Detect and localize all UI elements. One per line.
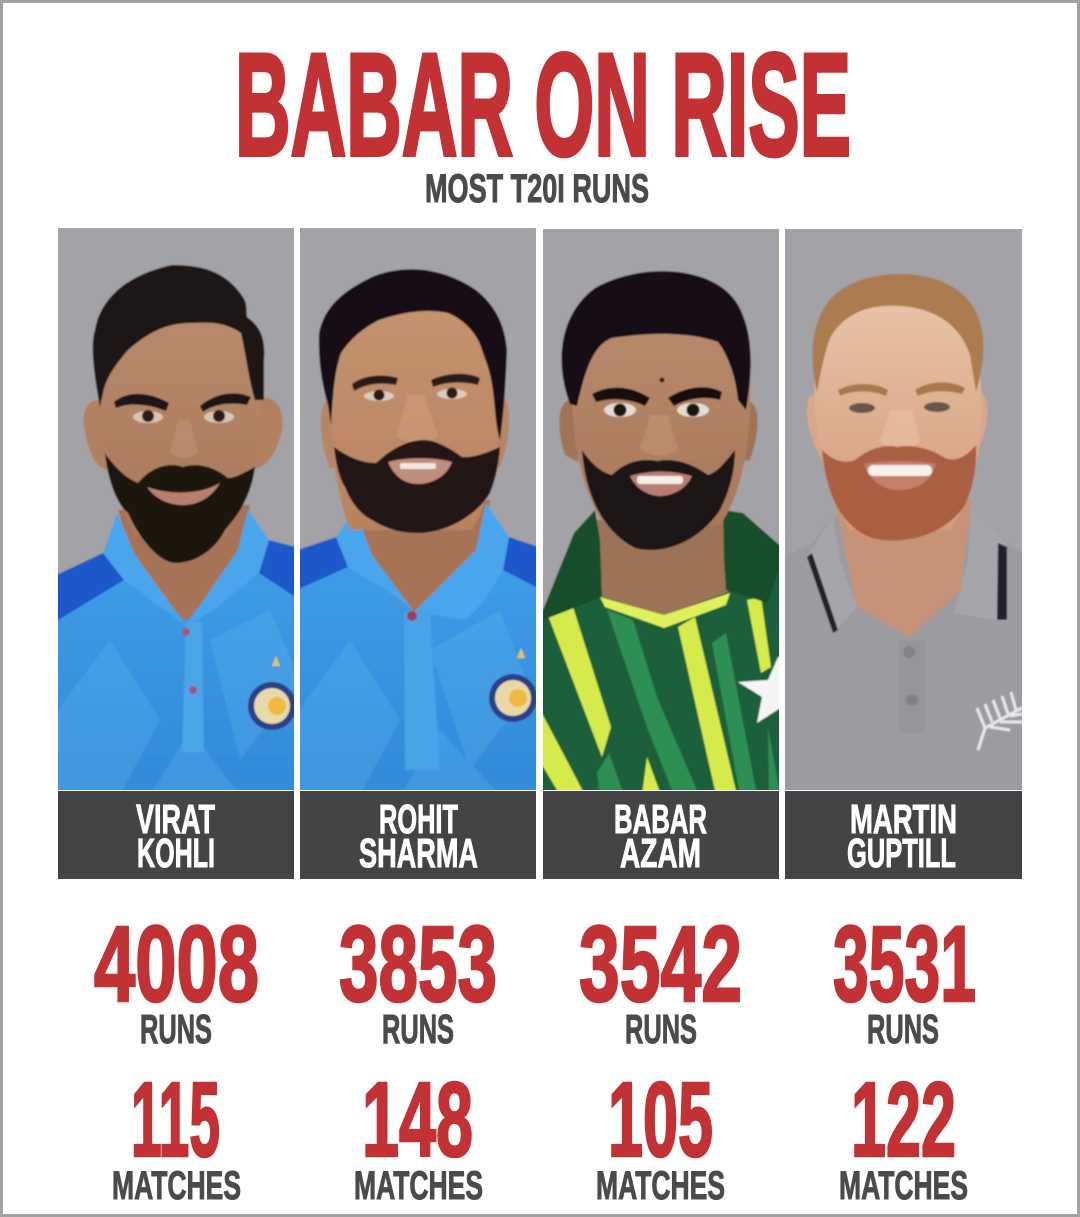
stats: Martin Guptill: MATCHES [839, 1164, 968, 1208]
stats: Virat Kohli: MATCHES [112, 1164, 241, 1208]
stats: Babar Azam: MATCHES [596, 1164, 725, 1208]
beard [334, 440, 500, 533]
ears [807, 395, 822, 460]
eyebrows and eyes [352, 376, 398, 391]
name bar: Martin Guptill: MARTIN [850, 796, 957, 842]
beard [582, 450, 735, 550]
hair [812, 274, 983, 392]
face [572, 332, 751, 524]
stripes [535, 597, 771, 795]
silver fern [977, 692, 1022, 750]
eyebrows and eyes [114, 394, 169, 411]
name bar: Virat Kohli: VIRAT [136, 796, 215, 842]
stats: Martin Guptill [833, 903, 976, 1208]
face [102, 302, 259, 535]
stats: Babar Azam [579, 903, 742, 1208]
ears [84, 400, 108, 470]
jersey [300, 566, 536, 790]
stats: Rohit Sharma: 148 [362, 1061, 473, 1179]
stats: Rohit Sharma: MATCHES [354, 1164, 483, 1208]
stats: Babar Azam: 105 [608, 1061, 713, 1179]
name bar: Martin Guptill [785, 791, 1022, 879]
name bar: Babar Azam [543, 791, 779, 879]
collar [807, 510, 1007, 632]
jersey [543, 565, 779, 790]
beard [822, 445, 976, 541]
name bar: Babar Azam: BABAR [614, 796, 707, 842]
star badge [738, 657, 785, 723]
name bar: Rohit Sharma [300, 791, 536, 879]
jersey [58, 572, 294, 790]
collar [543, 510, 785, 620]
buttons and placket [899, 640, 925, 733]
name bar: Rohit Sharma: ROHIT [379, 796, 458, 842]
panel: Rohit Sharma portrait [292, 220, 542, 795]
mouth [147, 483, 220, 505]
stats: Virat Kohli: 115 [131, 1061, 220, 1179]
stats: Virat Kohli: 4008 [94, 903, 259, 1024]
panel: Babar Azam portrait [535, 222, 785, 795]
name bar: Martin Guptill: GUPTILL [847, 830, 956, 876]
stats: Martin Guptill: 3531 [833, 903, 976, 1024]
face [815, 295, 981, 530]
stats: Martin Guptill: RUNS [867, 1006, 939, 1052]
stats: Virat Kohli: RUNS [140, 1006, 212, 1052]
name bar: Babar Azam: AZAM [620, 830, 701, 876]
neck [595, 515, 728, 615]
face [330, 301, 501, 530]
stats: Babar Azam: RUNS [625, 1006, 697, 1052]
stats: Martin Guptill: 122 [851, 1061, 956, 1179]
name bar: Rohit Sharma: SHARMA [359, 830, 478, 876]
eyebrows and eyes [592, 388, 650, 406]
shirt [777, 510, 1030, 795]
mouth [864, 461, 936, 490]
stats: Rohit Sharma: RUNS [382, 1006, 454, 1052]
neck [835, 500, 972, 637]
name bar: Virat Kohli: KOHLI [137, 830, 215, 876]
subtitle: MOST T20I RUNS [425, 167, 649, 211]
hair [562, 271, 751, 410]
stats: Rohit Sharma [339, 903, 497, 1208]
hair [93, 265, 264, 407]
hair [319, 269, 507, 440]
name bar: Virat Kohli [58, 791, 294, 879]
stats: Babar Azam: 3542 [579, 903, 742, 1024]
stats: Virat Kohli [94, 903, 259, 1208]
ears [559, 400, 578, 462]
ears [320, 400, 336, 468]
mouth [630, 472, 692, 496]
eyebrows and eyes [838, 384, 888, 396]
panel: Virat Kohli portrait [50, 220, 300, 795]
panel: Martin Guptill portrait [777, 222, 1030, 795]
beard [105, 453, 255, 563]
stats: Rohit Sharma: 3853 [339, 903, 497, 1024]
mouth [388, 458, 452, 484]
